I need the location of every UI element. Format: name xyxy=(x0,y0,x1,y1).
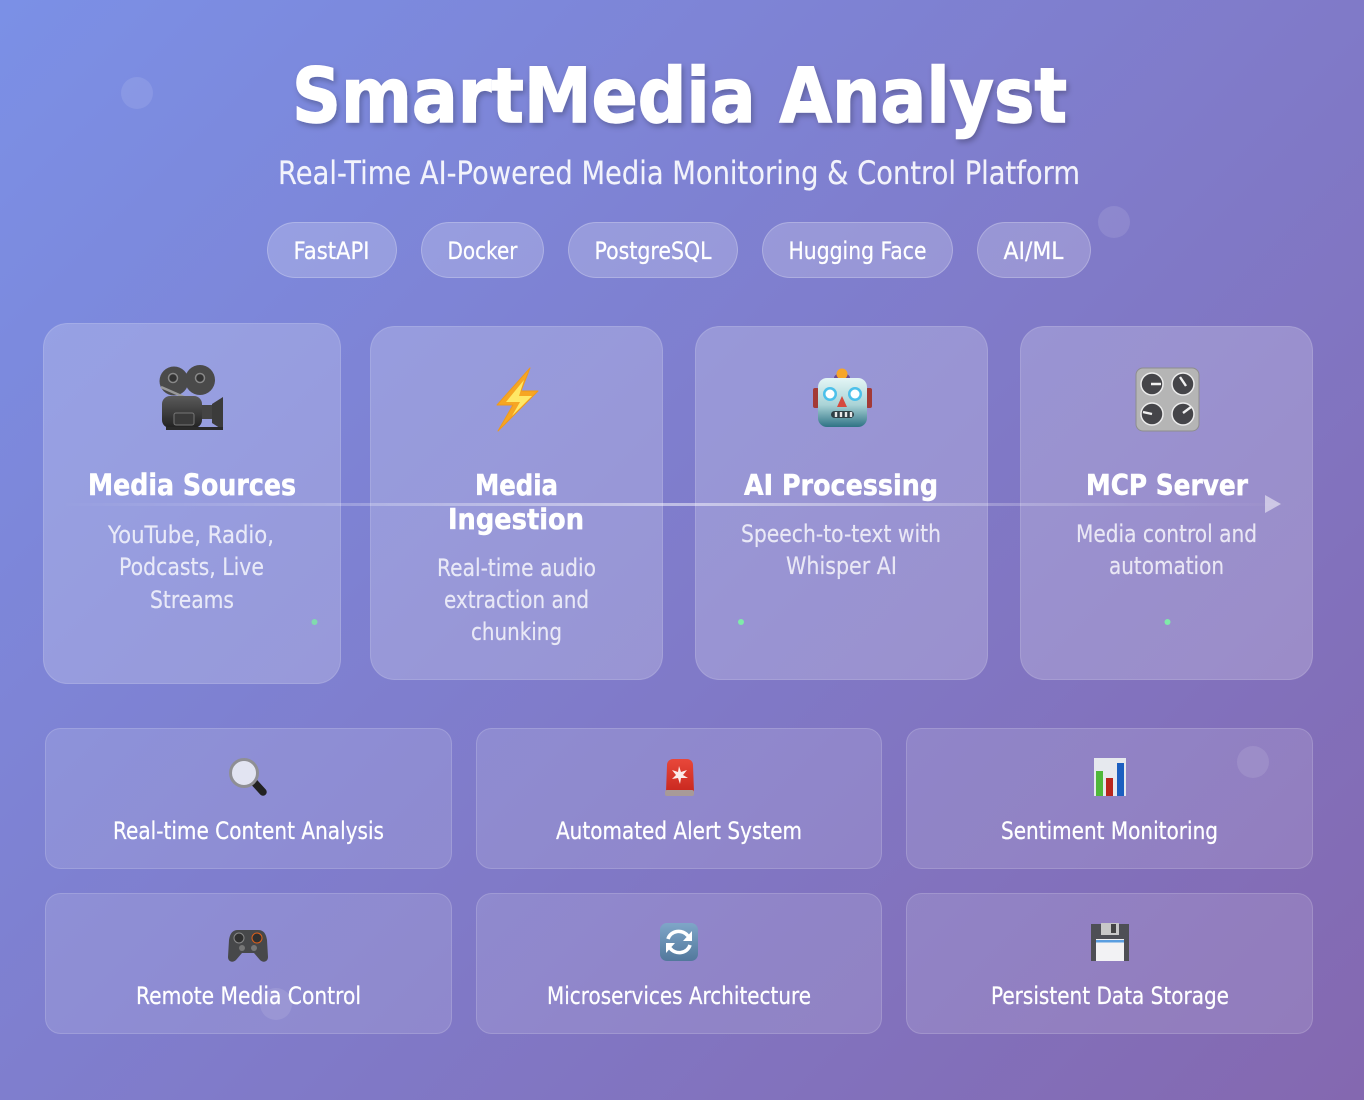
icon: movie camera xyxy=(160,365,223,430)
description: YouTube, Radio, xyxy=(107,520,274,549)
heading: MCP Server xyxy=(1086,468,1249,502)
pill: AI/ML xyxy=(978,222,1090,278)
pill: Docker xyxy=(422,222,544,278)
heading: AI Processing xyxy=(744,468,938,502)
description: chunking xyxy=(471,618,562,646)
panel: MCP Server xyxy=(1020,326,1312,680)
panel: AI Processing xyxy=(696,326,988,680)
feature: Real-time Content Analysis xyxy=(46,728,452,868)
description: extraction and xyxy=(444,586,589,614)
heading: Media xyxy=(475,468,558,502)
label: Persistent Data Storage xyxy=(991,982,1229,1010)
description xyxy=(741,520,941,580)
status dot: Media Sources xyxy=(312,619,318,625)
description: automation xyxy=(1109,552,1224,580)
title: SmartMedia Analyst xyxy=(292,51,1067,140)
panel: Media Sources xyxy=(44,324,340,684)
icon: refresh arrows xyxy=(660,923,698,961)
description xyxy=(437,554,596,646)
description: Media control and xyxy=(1076,520,1257,548)
description xyxy=(107,520,274,614)
feature: Persistent Data Storage xyxy=(906,894,1312,1034)
pill: FastAPI xyxy=(268,222,396,278)
floating circle: top left xyxy=(121,77,153,109)
description: Speech-to-text with xyxy=(741,520,941,548)
technology pills xyxy=(268,222,1090,278)
heading: Media Sources xyxy=(88,468,296,502)
label: Microservices Architecture xyxy=(547,982,811,1010)
panel: Media Ingestion xyxy=(370,326,662,680)
description: Real-time audio xyxy=(437,554,596,582)
feature: Remote Media Control xyxy=(46,894,452,1034)
pill: Hugging Face xyxy=(762,222,952,278)
description: Podcasts, Live xyxy=(119,552,264,581)
floating circle: sentiment card xyxy=(1237,746,1269,778)
icon: robot xyxy=(813,368,872,427)
floating circle: remote control card xyxy=(260,988,292,1020)
label: Real-time Content Analysis xyxy=(113,817,384,845)
pill: PostgreSQL xyxy=(568,222,738,278)
label: Automated Alert System xyxy=(556,817,802,845)
icon: floppy disk xyxy=(1091,923,1129,961)
description xyxy=(1076,520,1257,580)
label: Sentiment Monitoring xyxy=(1001,817,1218,845)
subtitle: Real-Time AI-Powered Media Monitoring & Control Platform xyxy=(278,154,1080,192)
floating circle: near pills xyxy=(1098,206,1130,238)
description: Streams xyxy=(150,585,234,614)
pill: FastAPI: FastAPI xyxy=(294,237,370,265)
pill: AI/ML: AI/ML xyxy=(1004,237,1064,265)
icon: game controller xyxy=(228,930,268,962)
heading xyxy=(448,468,584,536)
icon: magnifying glass xyxy=(230,760,263,792)
feature: Automated Alert System xyxy=(476,728,882,868)
status dot: MCP Server xyxy=(1164,619,1170,625)
icon: control knobs xyxy=(1136,368,1199,431)
feature: Sentiment Monitoring xyxy=(906,728,1312,868)
icon: bar chart xyxy=(1094,758,1126,796)
feature: Microservices Architecture xyxy=(476,894,882,1034)
label: Remote Media Control xyxy=(136,982,361,1010)
status dot: AI Processing xyxy=(738,619,744,625)
pill: Docker: Docker xyxy=(448,237,518,265)
description: Whisper AI xyxy=(786,552,897,580)
heading: Ingestion xyxy=(448,502,584,536)
pill: PostgreSQL: PostgreSQL xyxy=(594,237,712,265)
pill: Hugging Face: Hugging Face xyxy=(788,237,926,265)
icon: siren xyxy=(665,759,694,796)
icon: lightning bolt xyxy=(497,368,538,431)
flow arrow xyxy=(60,495,1290,513)
